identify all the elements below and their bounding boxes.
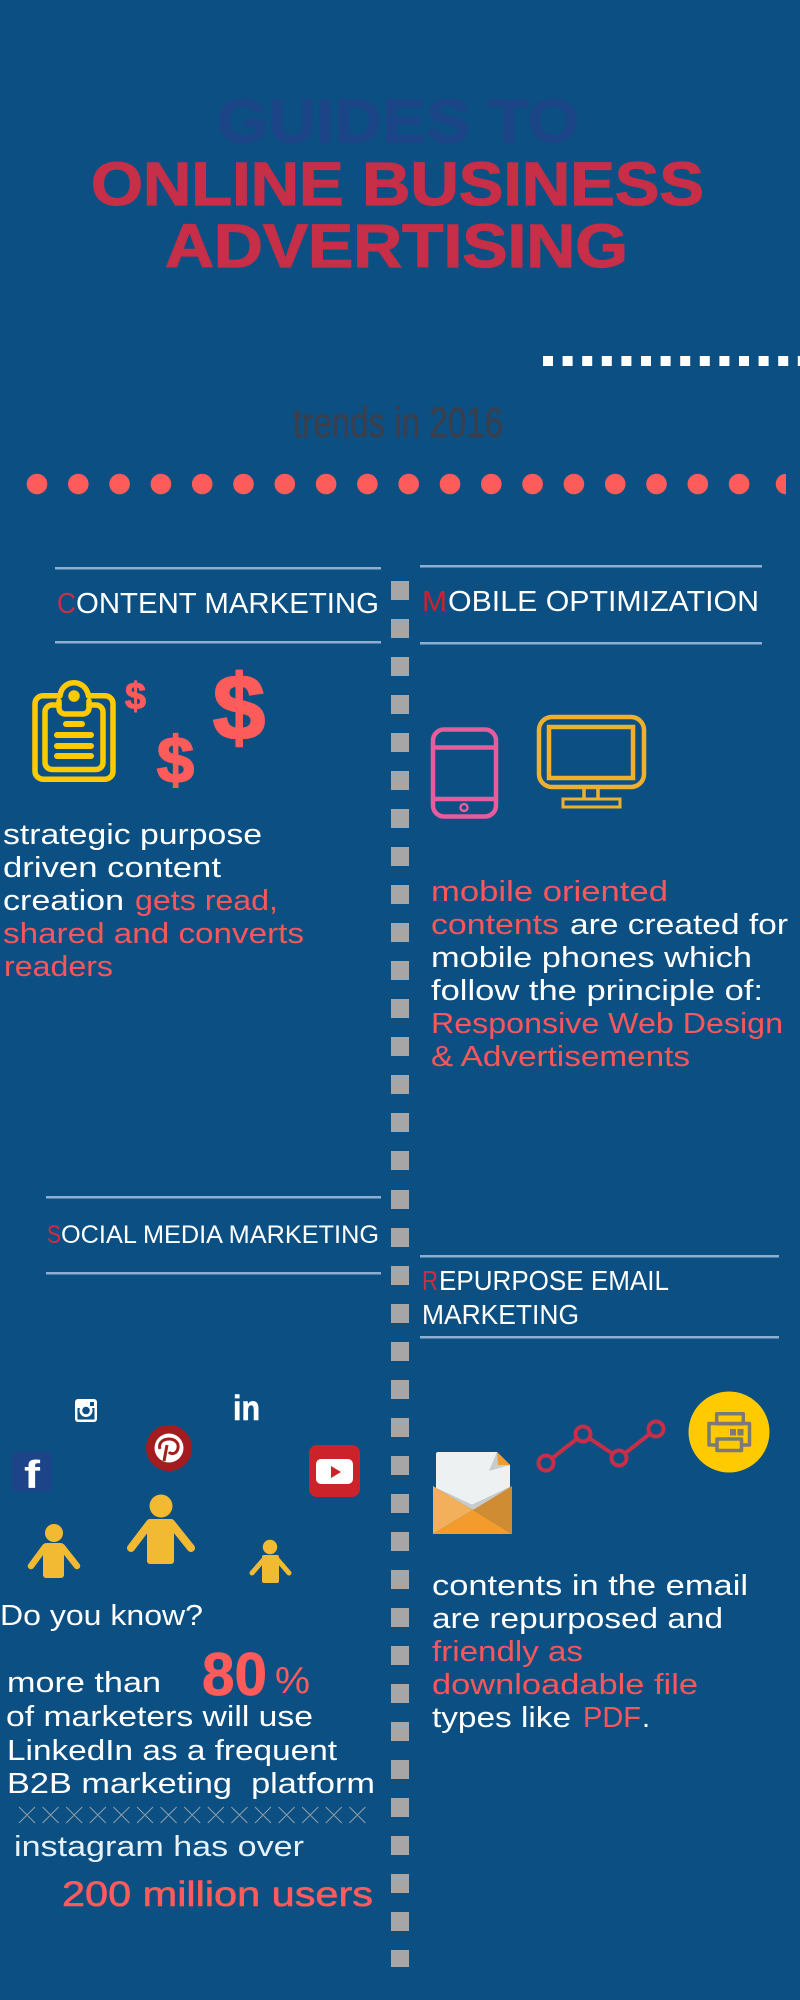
heading: social media marketing: S (47, 1221, 61, 1249)
icon: tablet (433, 730, 496, 816)
icon: linkedin: in (233, 1389, 260, 1428)
title line: advertising: ADVERTISING (165, 212, 628, 280)
callout: 80 percent: 80 (202, 1641, 267, 1708)
text: content marketing body: shared and converts (3, 918, 304, 950)
text: content marketing body: readers (4, 951, 113, 983)
text: repurpose email body (432, 1570, 748, 1734)
text: mobile optimization body: Responsive Web Design (431, 1008, 783, 1040)
title (91, 87, 704, 280)
icon: dollar signs: $ (157, 723, 194, 796)
text: repurpose email body: are repurposed and (432, 1603, 723, 1635)
panel: content marketing (3, 567, 381, 983)
icon: youtube (309, 1445, 360, 1497)
subtitle: trends in 2016 (293, 399, 503, 447)
callout: 80 percent: % (275, 1660, 310, 1702)
heading: mobile optimization: M (422, 586, 447, 618)
heading: social media marketing: OCIAL MEDIA MARKETING (61, 1221, 379, 1249)
text: mobile optimization body: mobile phones which (431, 942, 752, 974)
text: content marketing body: creation (3, 885, 124, 917)
icon: envelope (433, 1452, 512, 1534)
panel: social media marketing (0, 1196, 381, 1914)
icon: pinterest (146, 1425, 192, 1471)
title line: guides to: GUIDES TO (217, 87, 579, 155)
heading: repurpose email marketing (420, 1255, 779, 1338)
icon: line chart (538, 1422, 664, 1470)
callout: 80 percent: more than (7, 1667, 161, 1699)
text: content marketing body: strategic purpose (3, 819, 262, 851)
red dot row (27, 474, 786, 494)
white square row (543, 356, 800, 366)
heading: content marketing: C (57, 588, 76, 620)
icon: printer (688, 1392, 770, 1472)
text: repurpose email body: downloadable file (432, 1669, 698, 1701)
heading: repurpose email marketing: MARKETING (422, 1299, 579, 1330)
text: mobile optimization body: contents (431, 909, 559, 941)
icon: monitor (539, 717, 644, 807)
text: mobile optimization body: & Advertisements (431, 1041, 690, 1073)
heading: repurpose email marketing: R (422, 1265, 438, 1296)
text: repurpose email body: contents in the email (432, 1570, 748, 1602)
text: content marketing body: gets read, (135, 885, 278, 917)
text: do you know: Do you know? (0, 1600, 203, 1632)
text: content marketing body (3, 819, 304, 983)
text: repurpose email body: . (642, 1702, 650, 1734)
callout: 80 percent: B2B marketing platform (7, 1768, 375, 1800)
text: repurpose email body: types like (432, 1702, 571, 1734)
heading: mobile optimization (420, 565, 762, 644)
icon: facebook: f (24, 1454, 41, 1497)
text: content marketing body: driven content (3, 852, 221, 884)
heading: content marketing: ONTENT MARKETING (76, 588, 379, 620)
text: mobile optimization body: follow the principle of: (431, 975, 763, 1007)
icon: dollar signs: $ (125, 676, 146, 718)
icon: people (31, 1494, 289, 1583)
text: mobile optimization body: mobile oriented (431, 876, 668, 908)
text: mobile optimization body (431, 876, 788, 1073)
callout: instagram users: 200 million users (62, 1875, 373, 1914)
callout: instagram users: instagram has over (14, 1831, 304, 1863)
callout: 80 percent: of marketers will use (6, 1701, 313, 1733)
icon: dollar signs (125, 657, 265, 796)
icon: dollar signs: $ (213, 657, 265, 759)
callout: 80 percent (6, 1641, 375, 1800)
panel: mobile optimization (420, 565, 788, 1073)
callout: instagram users (14, 1831, 373, 1914)
icon: instagram (75, 1399, 97, 1422)
text: mobile optimization body: are created for (570, 909, 788, 941)
cross divider (19, 1807, 365, 1823)
heading: repurpose email marketing: EPURPOSE EMAIL (439, 1265, 669, 1296)
title line: online business: ONLINE BUSINESS (91, 150, 704, 218)
text: repurpose email body: PDF (583, 1702, 641, 1734)
central square divider (391, 581, 409, 1967)
callout: 80 percent: LinkedIn as a frequent (7, 1735, 337, 1767)
text: repurpose email body: friendly as (432, 1636, 583, 1668)
panel: repurpose email marketing (420, 1255, 779, 1734)
heading: content marketing (55, 567, 381, 644)
heading: mobile optimization: OBILE OPTIMIZATION (448, 586, 759, 618)
heading: social media marketing (46, 1196, 381, 1274)
icon: clipboard (35, 683, 113, 779)
icon: facebook (12, 1452, 52, 1497)
